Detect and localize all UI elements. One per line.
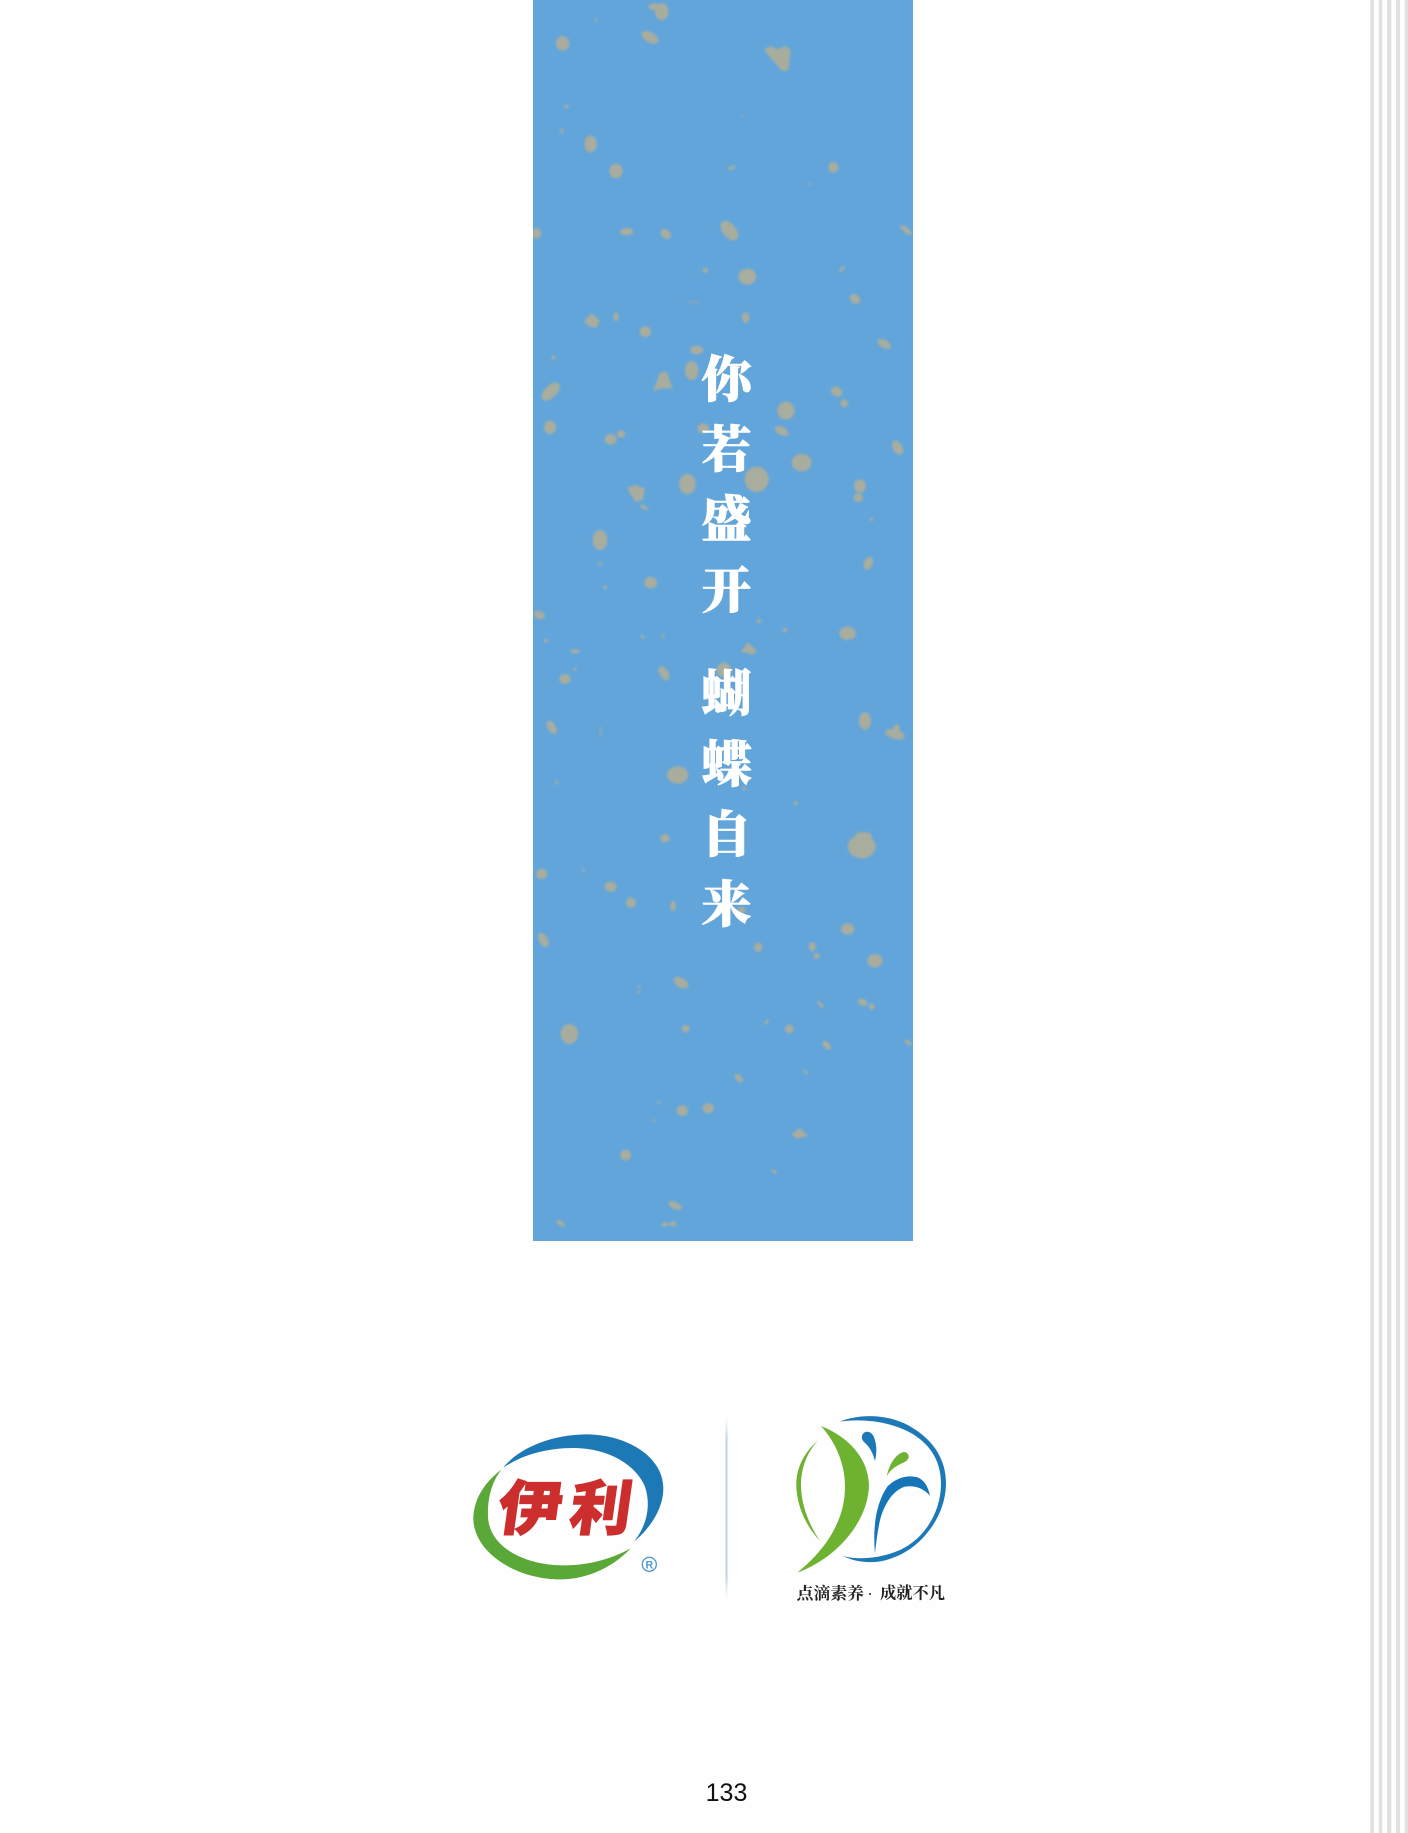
page number: 133 [706, 1779, 747, 1807]
logo caption [797, 1583, 945, 1603]
title: vertical slogan: 蝶 [702, 737, 752, 793]
panel: blue speckled banner [532, 0, 913, 1241]
title: vertical slogan [702, 352, 756, 933]
logo: Yili: R [645, 1559, 653, 1571]
title: vertical slogan: 开 [702, 563, 752, 619]
title: vertical slogan: 盛 [702, 492, 752, 548]
page edge stripes [1370, 0, 1408, 1833]
logo: Yili: 利 [566, 1476, 637, 1542]
title: vertical slogan: 自 [702, 807, 752, 863]
title: vertical slogan: 若 [702, 422, 752, 478]
title: vertical slogan: 蝴 [702, 666, 752, 722]
logo caption: 成就不凡 [880, 1583, 945, 1602]
divider between logos [726, 1418, 728, 1598]
logo: Yili: 伊 [493, 1477, 567, 1543]
logo: Yili [473, 1434, 663, 1579]
title: vertical slogan: 你 [702, 352, 756, 408]
title: vertical slogan: 来 [702, 877, 752, 933]
logo caption: 点滴素养 [797, 1583, 864, 1603]
logo: nutrition literacy emblem [796, 1416, 946, 1603]
